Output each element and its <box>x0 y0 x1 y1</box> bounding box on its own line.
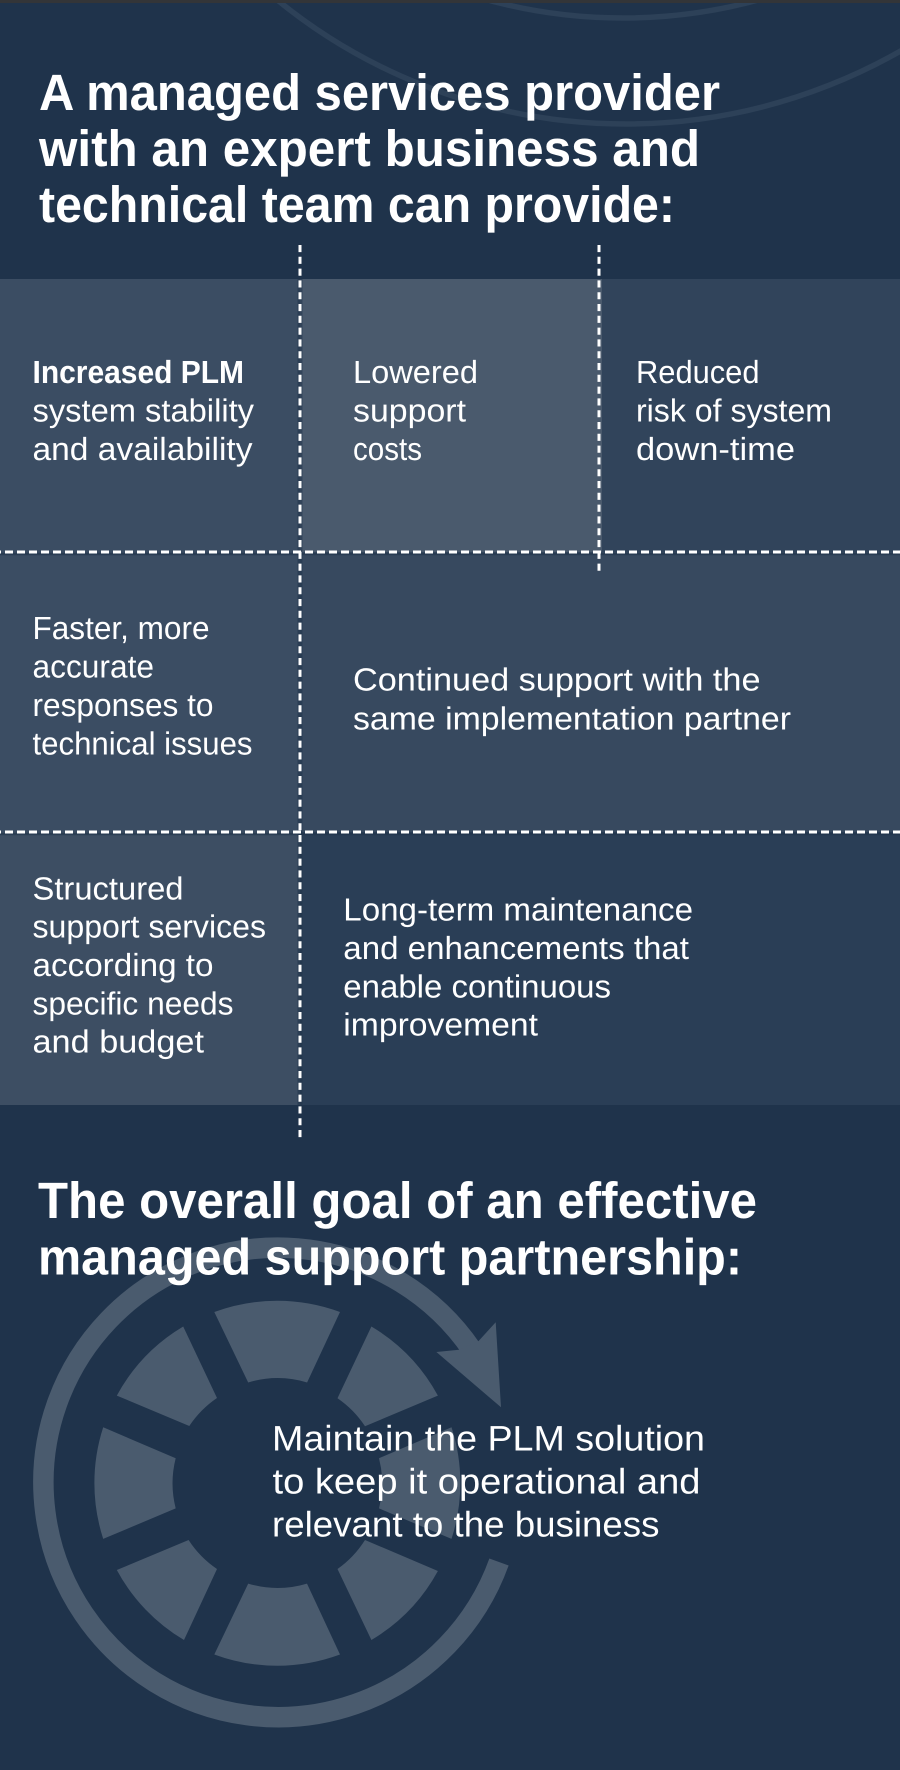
heading: overall goal: managed support partnership: <box>38 1228 742 1286</box>
panel: lowered support costs: costs <box>353 431 422 467</box>
panel: long-term maintenance: improvement <box>343 1007 538 1043</box>
panel: reduced risk of down-time: Reduced <box>636 354 760 390</box>
panel: increased PLM stability: system stability <box>32 392 254 428</box>
dashed grid lines <box>0 245 900 1138</box>
panel: lowered support costs <box>300 279 602 552</box>
cycle arrow ring <box>43 1248 501 1717</box>
panel: faster responses: technical issues <box>32 726 252 762</box>
top decorative arcs <box>74 0 900 124</box>
panel: faster responses: responses to <box>32 687 214 723</box>
title: technical team can provide: <box>39 176 675 233</box>
panel: continued support <box>300 552 900 832</box>
panel: reduced risk of down-time <box>602 279 900 552</box>
panel: lowered support costs: Lowered <box>353 354 478 390</box>
panel: structured support services: and budget <box>32 1024 204 1060</box>
panel: increased PLM stability: Increased PLM <box>32 354 244 390</box>
panel: structured support services: support services <box>32 909 266 945</box>
goal statement <box>272 1419 705 1545</box>
panel: faster responses: accurate <box>32 648 154 684</box>
panel: long-term maintenance <box>300 832 900 1105</box>
panel: increased PLM stability: and availability <box>32 431 253 467</box>
panel: reduced risk of down-time: risk of system <box>636 392 832 428</box>
heading: overall goal <box>38 1172 757 1286</box>
title: A managed services provider <box>39 64 720 121</box>
heading: overall goal: The overall goal of an effective <box>38 1172 757 1229</box>
icon: cycle wheel <box>43 1248 501 1717</box>
panel: faster responses <box>0 552 300 832</box>
panel: long-term maintenance: and enhancements that <box>343 930 689 966</box>
goal statement: Maintain the PLM solution <box>272 1419 705 1459</box>
panel: reduced risk of down-time: down-time <box>636 431 795 467</box>
panel: long-term maintenance: Long-term maintenance <box>343 892 693 928</box>
goal statement: relevant to the business <box>272 1505 660 1545</box>
panel: structured support services <box>0 832 300 1105</box>
title: with an expert business and <box>38 120 700 177</box>
panel: structured support services: specific needs <box>32 985 234 1021</box>
goal statement: to keep it operational and <box>272 1462 700 1502</box>
panel: structured support services: according to <box>32 947 214 983</box>
panel: continued support: Continued support with the <box>353 662 760 698</box>
panel: lowered support costs: support <box>353 392 466 428</box>
panel: faster responses: Faster, more <box>32 610 210 646</box>
wheel segments <box>94 1301 460 1666</box>
panel: structured support services: Structured <box>32 870 184 906</box>
panel: long-term maintenance: enable continuous <box>343 968 611 1004</box>
panel: continued support: same implementation partner <box>353 700 791 736</box>
panel: increased PLM stability <box>0 279 300 552</box>
title <box>38 64 720 233</box>
